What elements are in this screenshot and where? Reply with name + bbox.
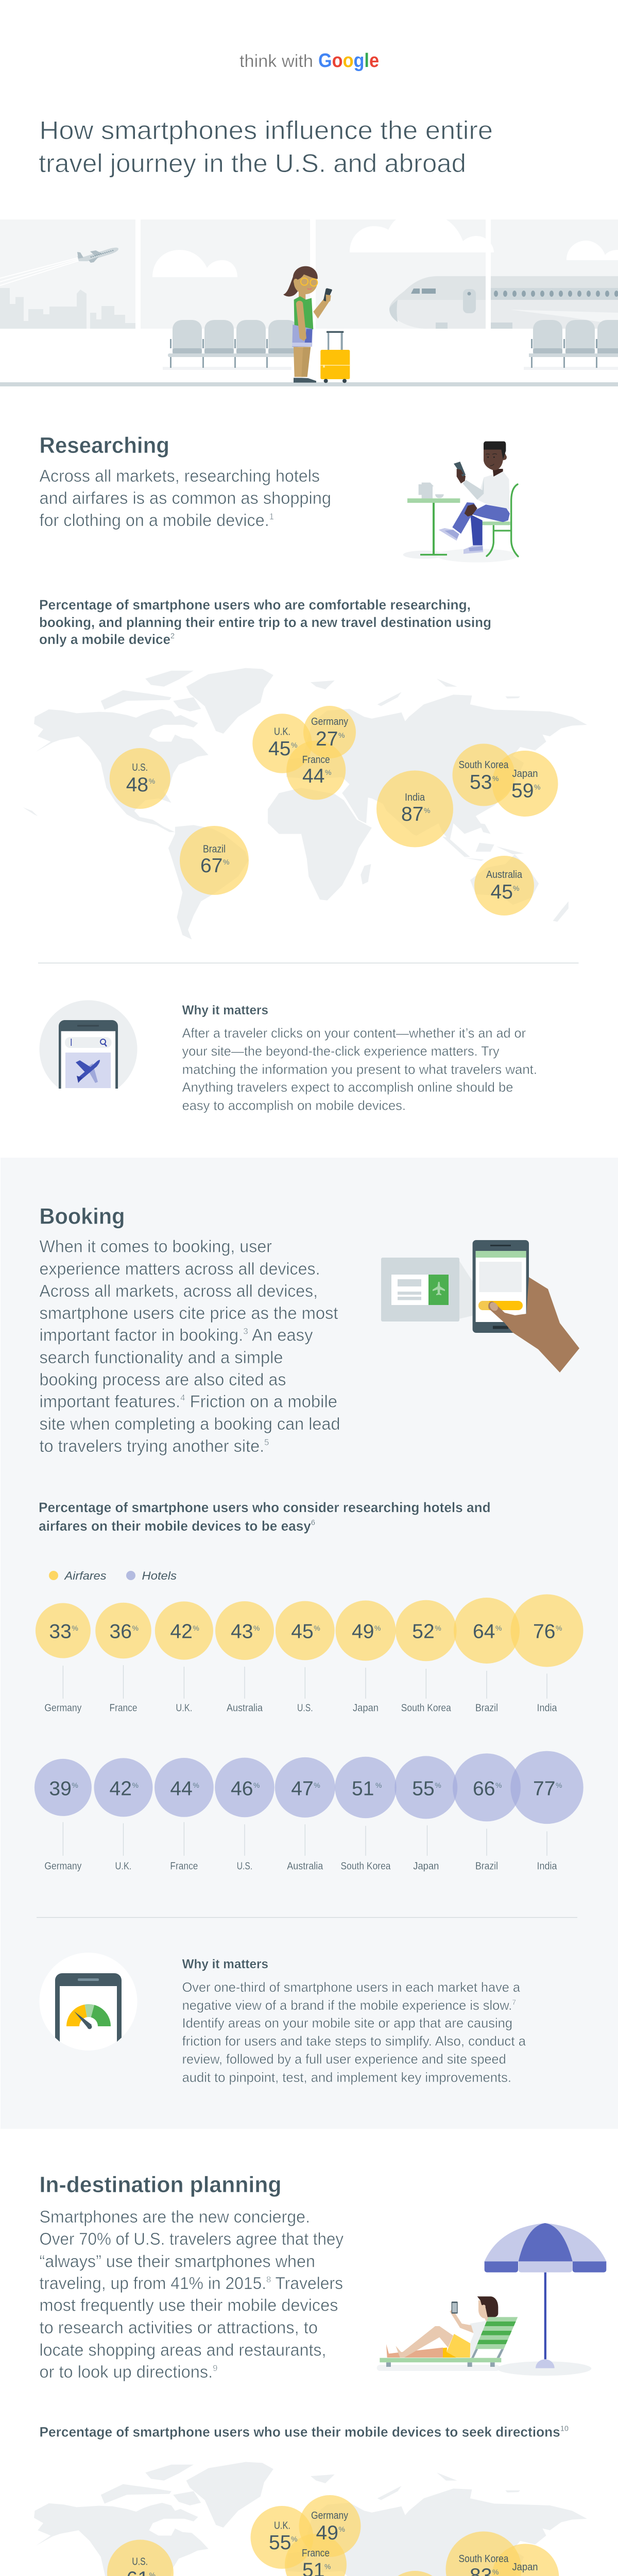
hotels: Japan: 55 xyxy=(412,1778,435,1800)
label: Germany 49%: 49 xyxy=(316,2522,338,2544)
label: India 87%: % xyxy=(424,806,430,815)
bubble: Brazil xyxy=(180,826,249,895)
label: U.K. 55%: 55 xyxy=(269,2532,291,2554)
label: Japan 64%: Japan xyxy=(512,2562,538,2573)
label: France 44%: % xyxy=(325,768,331,776)
hotels: France xyxy=(154,1758,214,1872)
airfares: South Korea: % xyxy=(435,1624,441,1632)
text block: booking intro: important factor in booking. xyxy=(39,1325,245,1345)
airfares: U.K.: U.K. xyxy=(176,1702,192,1714)
hotels: Australia: Australia xyxy=(287,1861,323,1872)
airfares: Japan: % xyxy=(374,1624,381,1632)
text block: in-destination intro: Travelers xyxy=(271,2274,343,2293)
text block: in-destination intro: 9 xyxy=(213,2363,217,2373)
airfares: Brazil: % xyxy=(495,1624,502,1632)
text: why it matters: negative view of a brand if the mobile experience is slow. xyxy=(182,1997,519,2013)
chart title: comfortable researching xyxy=(39,597,491,647)
airfares: France: France xyxy=(109,1702,137,1714)
airfares: U.K. xyxy=(155,1601,213,1714)
label: France 51%: France xyxy=(302,2548,330,2559)
label: France 44% xyxy=(302,754,331,787)
label: Japan 59%: % xyxy=(534,783,540,791)
hotels: Australia: 47 xyxy=(291,1778,314,1800)
hotels: Germany: 39 xyxy=(49,1778,72,1800)
heading: Booking: Booking xyxy=(39,1204,125,1229)
text block: in-destination intro xyxy=(39,2207,344,2381)
chart title: easy to research: Percentage of smartphone users who consider researching hotels and xyxy=(39,1500,491,1515)
chart title: comfortable researching: 2 xyxy=(170,632,175,640)
panel: in-destination planning xyxy=(23,2172,606,2576)
icon: small airplane xyxy=(77,248,118,263)
hotels: Japan: Japan xyxy=(413,1861,439,1872)
bubble chart: hotels xyxy=(35,1751,583,1872)
chart title: seek directions: Percentage of smartphone users who use their mobile devices to seek directions xyxy=(39,2425,575,2440)
bubble: India xyxy=(383,2571,447,2576)
airfares: South Korea: South Korea xyxy=(401,1702,452,1714)
title xyxy=(39,116,493,178)
text block: researching intro: and airfares is as common as shopping xyxy=(39,488,331,507)
label: France 51%: % xyxy=(324,2563,331,2571)
legend xyxy=(49,1569,177,1582)
text block: in-destination intro: “always” use their smartphones when xyxy=(39,2251,315,2271)
hotels: Brazil xyxy=(453,1753,521,1872)
hotels: Japan: % xyxy=(435,1781,441,1789)
hotels: South Korea: 51 xyxy=(352,1778,374,1800)
bubble: U.K. xyxy=(252,714,312,773)
chart title: comfortable researching: booking, and planning their entire trip to a new travel destination using xyxy=(39,615,491,630)
label: Germany 27%: 27 xyxy=(316,728,338,750)
label: South Korea 83% xyxy=(458,2553,509,2576)
label: Japan 59%: 59 xyxy=(511,780,534,802)
clouds xyxy=(152,214,618,277)
airfares: U.S.: 45 xyxy=(291,1621,314,1643)
airfares: U.K.: % xyxy=(193,1624,199,1632)
illustration: man sitting at cafe table with phone xyxy=(403,442,519,563)
text block: booking intro: experience matters across all devices. xyxy=(39,1259,320,1278)
logo: think with Google: Google xyxy=(318,50,379,72)
icon: phone with plane search xyxy=(39,1000,137,1089)
label: Germany 27% xyxy=(311,716,348,750)
text block: in-destination intro: most frequently use their mobile devices xyxy=(39,2296,338,2315)
seats: left group xyxy=(163,320,298,370)
hotels: Brazil: Brazil xyxy=(475,1861,498,1872)
text: why it matters xyxy=(182,1003,537,1113)
text block: in-destination intro: or to look up directions. xyxy=(39,2362,215,2381)
hotels: Brazil: % xyxy=(495,1781,502,1789)
airfares: U.K.: 42 xyxy=(170,1621,193,1643)
illustration: man on lounger under umbrella xyxy=(377,2223,606,2376)
logo: think with Google: think with xyxy=(239,52,313,71)
airfares: India: India xyxy=(537,1702,557,1714)
airfares: U.S. xyxy=(276,1601,335,1714)
hotels: U.S.: U.S. xyxy=(237,1861,252,1872)
text: why it matters: Why it matters xyxy=(182,1957,268,1971)
seats: right group xyxy=(524,320,618,370)
airfares: South Korea xyxy=(396,1600,457,1714)
label: South Korea 83%: South Korea xyxy=(458,2553,509,2565)
airfares: Japan: Japan xyxy=(353,1702,379,1714)
windows xyxy=(0,219,618,329)
text block: booking intro: site when completing a booking can lead xyxy=(39,1414,340,1433)
label: Germany 27%: Germany xyxy=(311,716,348,727)
label: Germany 49% xyxy=(311,2510,348,2544)
bubble: U.S. xyxy=(110,748,170,809)
chart title: easy to research: 6 xyxy=(311,1518,315,1527)
hotels: Japan xyxy=(394,1756,457,1872)
bubble: Germany xyxy=(299,2495,360,2557)
text block: in-destination intro: Over 70% of U.S. travelers agree that they xyxy=(39,2229,344,2248)
label: Germany 49%: Germany xyxy=(311,2510,348,2521)
hotels: U.K.: 42 xyxy=(109,1778,132,1800)
text: why it matters: review, followed by a full user experience and site speed xyxy=(182,2052,506,2067)
label: Australia 45%: % xyxy=(513,884,519,892)
label: Germany 49%: % xyxy=(339,2525,345,2533)
text block: booking intro: Across all markets, across all devices, xyxy=(39,1281,318,1300)
label: France 44%: 44 xyxy=(302,765,324,787)
contrails xyxy=(0,258,79,285)
hotels: France: % xyxy=(193,1781,199,1789)
chart title: comfortable researching: Percentage of smartphone users who are comfortable researching, xyxy=(39,597,471,613)
label: Germany 27%: % xyxy=(338,731,345,739)
label: Australia 45%: 45 xyxy=(490,881,513,903)
airfares: Germany: 33 xyxy=(49,1621,72,1643)
label: South Korea 53%: 53 xyxy=(470,771,492,793)
world map xyxy=(23,2462,587,2576)
text block: in-destination intro: 8 xyxy=(266,2275,271,2284)
airfares: France: % xyxy=(132,1624,139,1632)
airfares: Australia: % xyxy=(253,1624,260,1632)
label: U.S. 61% xyxy=(127,2556,156,2576)
title: How smartphones influence the entire xyxy=(39,116,493,145)
text: why it matters: After a traveler clicks on your content—whether it’s an ad or xyxy=(182,1025,526,1041)
hotels: France: France xyxy=(170,1861,198,1872)
text block: booking intro: 5 xyxy=(264,1437,269,1447)
map chart: world map with bubbles xyxy=(23,2462,587,2576)
woman with phone and suitcase xyxy=(283,266,350,383)
airfares: India: % xyxy=(556,1624,562,1632)
title: travel journey in the U.S. and abroad xyxy=(39,149,466,178)
hotels: Australia xyxy=(275,1757,335,1872)
label: U.S. 48%: U.S. xyxy=(132,762,148,773)
text: why it matters: matching the information you present to what travelers want. xyxy=(182,1061,537,1077)
chart title: comfortable researching: only a mobile device xyxy=(39,632,175,647)
text block: booking intro: important features. xyxy=(39,1392,181,1411)
hotels: U.S.: % xyxy=(253,1781,260,1789)
label: U.K. 55% xyxy=(269,2520,297,2554)
bubble: South Korea xyxy=(446,2532,521,2576)
hotels: Germany xyxy=(35,1759,92,1872)
text block: in-destination intro: to research activities or attractions, to xyxy=(39,2318,318,2337)
label: Brazil 67%: Brazil xyxy=(203,844,226,855)
text: why it matters: Why it matters xyxy=(182,1003,268,1018)
label: U.S. 48%: 48 xyxy=(126,774,148,796)
label: Brazil 67%: % xyxy=(223,858,229,866)
label: U.S. 48% xyxy=(126,762,155,796)
label: Japan 59% xyxy=(511,768,540,802)
text: why it matters: Identify areas on your mobile site or app that are causing xyxy=(182,2015,512,2031)
airfares: Brazil: Brazil xyxy=(475,1702,498,1714)
airfares: France: 36 xyxy=(109,1621,132,1643)
label: Brazil 67%: 67 xyxy=(200,855,222,877)
label: Australia 45%: Australia xyxy=(486,869,523,880)
label: India 87%: 87 xyxy=(401,803,423,825)
hotels: Germany: % xyxy=(72,1781,78,1789)
label: Japan 59%: Japan xyxy=(512,768,538,779)
label: South Korea 53% xyxy=(458,759,509,793)
text block: booking intro: 3 xyxy=(243,1326,248,1336)
airfares: Japan xyxy=(336,1600,396,1714)
label: U.K. 45%: U.K. xyxy=(274,726,290,738)
bubble: Japan xyxy=(492,751,558,817)
callout: why it matters (booking) xyxy=(39,1953,526,2085)
hotels: India xyxy=(510,1751,583,1872)
text block: in-destination intro: Smartphones are the new concierge. xyxy=(39,2207,310,2226)
legend: Airfares xyxy=(63,1569,106,1582)
text block: researching intro: for clothing on a mobile device. xyxy=(39,511,273,530)
bubble: Japan xyxy=(491,2544,559,2576)
airfares: India xyxy=(511,1594,583,1714)
hotels: U.K.: U.K. xyxy=(115,1861,132,1872)
legend: Hotels xyxy=(142,1569,177,1582)
text block: researching intro: 1 xyxy=(269,512,274,521)
hotels: Germany: Germany xyxy=(44,1861,81,1872)
text block: booking intro: booking process are also cited as xyxy=(39,1370,286,1389)
text block: booking intro: When it comes to booking, user xyxy=(39,1236,272,1256)
hotels: India: % xyxy=(556,1781,562,1789)
text: why it matters: Anything travelers expect to accomplish online should be xyxy=(182,1079,513,1095)
airfares: South Korea: 52 xyxy=(412,1621,435,1643)
hotels: U.K. xyxy=(94,1758,152,1872)
airfares: U.S.: U.S. xyxy=(297,1702,313,1714)
text: why it matters: friction for users and take steps to simplify. Also, conduct a xyxy=(182,2033,526,2048)
label: U.K. 45%: 45 xyxy=(268,738,290,760)
text block: researching intro: Across all markets, researching hotels xyxy=(39,466,320,485)
text block: booking intro: 4 xyxy=(180,1393,185,1402)
text block: in-destination intro: locate shopping areas and restaurants, xyxy=(39,2340,327,2359)
floor line xyxy=(0,382,618,386)
text block: researching intro xyxy=(39,466,331,530)
label: U.K. 55%: U.K. xyxy=(274,2520,290,2532)
bubble: India xyxy=(376,771,453,847)
label: India 87% xyxy=(401,792,430,825)
text: why it matters: your site—the beyond-the-click experience matters. Try xyxy=(182,1043,500,1059)
text block: booking intro: smartphone users cite price as the most xyxy=(39,1303,338,1323)
callout: why it matters (researching) xyxy=(39,1000,537,1113)
label: U.K. 45%: % xyxy=(291,741,297,749)
bubble: France xyxy=(286,741,346,800)
big airplane xyxy=(389,276,618,329)
map chart: world map with bubbles xyxy=(23,668,587,940)
hotels: U.S.: 46 xyxy=(231,1778,253,1800)
text: why it matters: 7 xyxy=(512,1998,516,2006)
hotels: France: 44 xyxy=(170,1778,193,1800)
heading: In-destination planning: In-destination planning xyxy=(39,2172,281,2197)
hero illustration: airport xyxy=(0,214,618,386)
text: why it matters: Over one-third of smartphone users in each market have a xyxy=(182,1979,521,1995)
label: South Korea 53%: % xyxy=(492,774,499,783)
airfares: Germany: Germany xyxy=(44,1702,81,1714)
world map xyxy=(23,668,587,940)
label: U.K. 55%: % xyxy=(291,2535,297,2543)
bubble: South Korea xyxy=(452,744,515,806)
label: U.S. 48%: % xyxy=(149,777,155,785)
heading: Researching: Researching xyxy=(39,433,169,458)
text block: in-destination intro: traveling, up from 41% in 2015. xyxy=(39,2274,274,2293)
logo: think with Google xyxy=(239,50,379,72)
chart title: easy to research: airfares on their mobile devices to be easy xyxy=(39,1518,319,1534)
airfares: Australia: 43 xyxy=(231,1621,253,1643)
airfares: Brazil: 64 xyxy=(473,1621,495,1643)
text: why it matters: audit to pinpoint, test, and implement key improvements. xyxy=(182,2070,511,2085)
label: Australia 45% xyxy=(486,869,523,903)
airfares: Japan: 49 xyxy=(352,1621,374,1643)
text: why it matters: easy to accomplish on mobile devices. xyxy=(182,1097,406,1113)
label: South Korea 83%: % xyxy=(492,2568,499,2576)
bubble: U.K. xyxy=(250,2506,313,2569)
label: U.K. 45% xyxy=(268,726,297,760)
label: U.S. 61%: U.S. xyxy=(132,2556,148,2568)
hotels: U.S. xyxy=(215,1758,274,1872)
panel: researching xyxy=(23,433,587,1113)
hotels: India: 77 xyxy=(533,1778,555,1800)
chart title: seek directions: 10 xyxy=(560,2425,569,2433)
hotels: South Korea: South Korea xyxy=(341,1861,391,1872)
icon: phone with speed gauge xyxy=(39,1953,137,2050)
label: South Korea 53%: South Korea xyxy=(458,759,509,771)
text block: booking intro: An easy xyxy=(248,1325,313,1345)
panel: booking xyxy=(35,1204,583,2085)
label: France 44%: France xyxy=(302,754,330,766)
hotels: India: India xyxy=(537,1861,557,1872)
airfares: France xyxy=(95,1603,151,1714)
hotels: South Korea: % xyxy=(375,1781,382,1789)
bubble: U.S. xyxy=(107,2540,174,2576)
bubble: France xyxy=(285,2534,347,2576)
bubble: Australia xyxy=(474,856,534,916)
text block: booking intro: to travelers trying another site. xyxy=(39,1436,268,1455)
hotels: U.K.: % xyxy=(132,1781,139,1789)
hotels: South Korea xyxy=(335,1757,397,1872)
label: India 87%: India xyxy=(405,792,425,803)
text block: booking intro xyxy=(39,1236,340,1455)
text: why it matters xyxy=(182,1957,526,2085)
skyline xyxy=(0,288,135,329)
illustration: ticket and phone in hand xyxy=(381,1240,579,1372)
airfares: Germany xyxy=(36,1603,91,1714)
label: Brazil 67% xyxy=(200,844,229,877)
airfares: Australia xyxy=(215,1601,274,1714)
airfares: U.S.: % xyxy=(314,1624,320,1632)
airfares: Germany: % xyxy=(72,1624,78,1632)
label: France 51% xyxy=(302,2548,331,2576)
bubble chart: airfares xyxy=(36,1594,583,1714)
hotels: Brazil: 66 xyxy=(473,1778,495,1800)
hotels: Australia: % xyxy=(314,1781,320,1789)
airfares: India: 76 xyxy=(533,1621,555,1643)
airfares: Brazil xyxy=(454,1598,520,1714)
text block: booking intro: Friction on a mobile xyxy=(185,1392,337,1411)
airfares: Australia: Australia xyxy=(227,1702,263,1714)
bubble: Germany xyxy=(303,706,356,758)
chart title: easy to research xyxy=(39,1500,491,1534)
text block: booking intro: search functionality and a simple xyxy=(39,1348,283,1367)
section background: booking xyxy=(1,1158,618,2129)
